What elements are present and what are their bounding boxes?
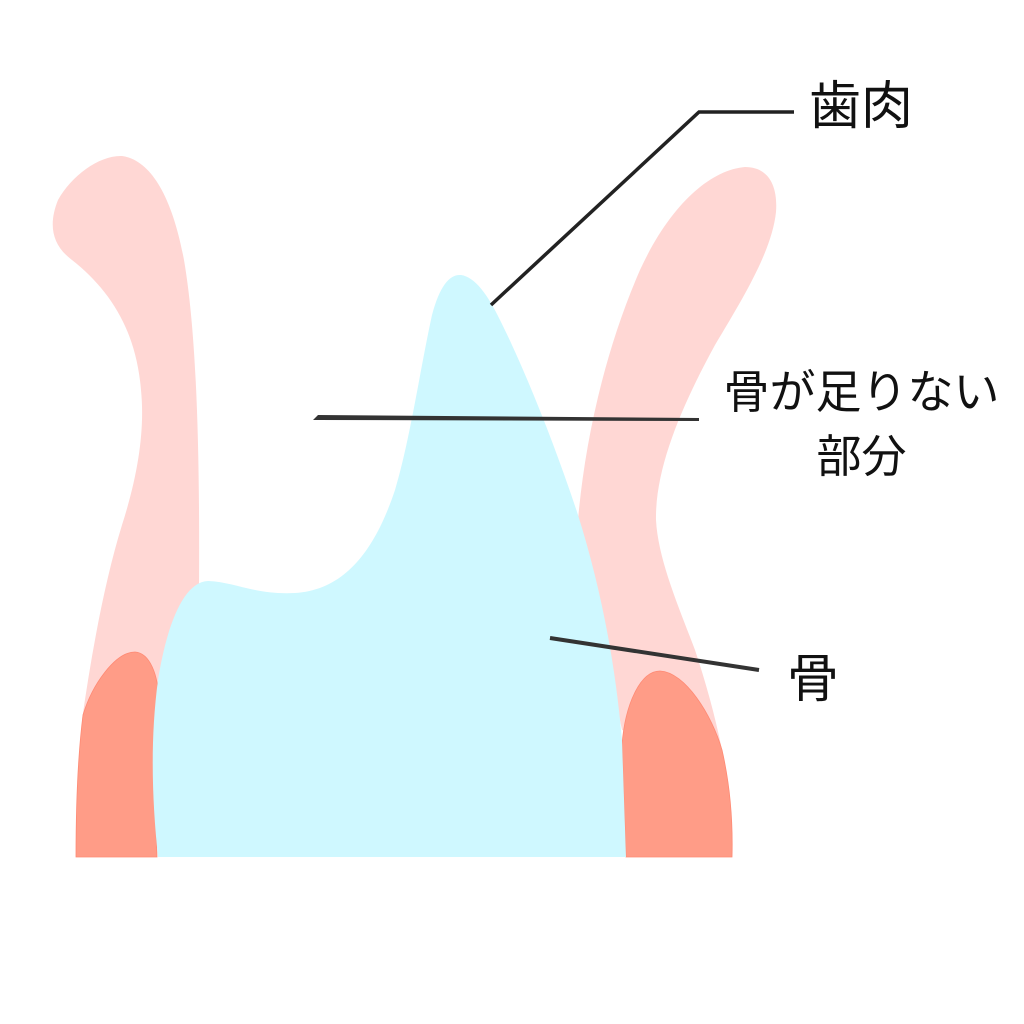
leader line: gum bbox=[491, 112, 794, 305]
leader line: missing bone bbox=[313, 415, 699, 421]
leader line: bone bbox=[550, 638, 759, 670]
label: missing bone bbox=[724, 366, 1000, 482]
label: missing bone: 骨が足りない bbox=[724, 366, 1000, 418]
label: bone: 骨 bbox=[787, 651, 839, 709]
bone bbox=[153, 275, 626, 857]
right gum root bbox=[622, 671, 732, 857]
label: gum: 歯肉 bbox=[809, 78, 913, 136]
label: missing bone: 部分 bbox=[816, 431, 907, 482]
left gum root bbox=[76, 652, 159, 857]
left gum bbox=[53, 156, 199, 720]
right gum bbox=[578, 167, 776, 750]
